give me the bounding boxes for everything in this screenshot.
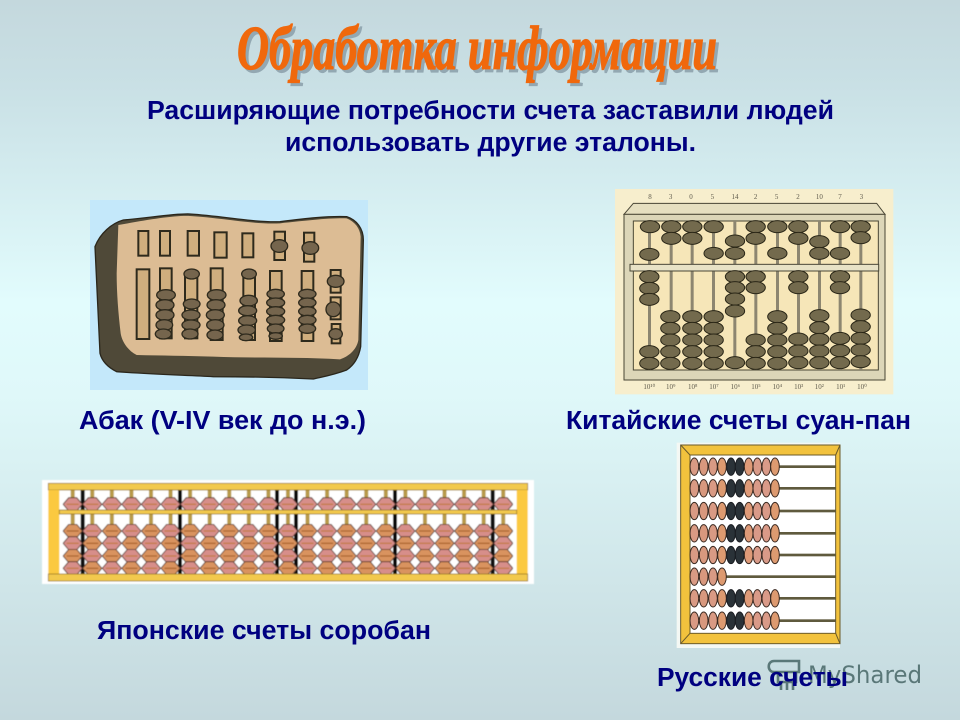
caption: soroban: Японские счеты соробан [97, 617, 431, 645]
illustration: Chinese suan-pan: 10² [815, 383, 824, 391]
intro text: Расширяющие потребности счета заставили людей [147, 97, 834, 125]
illustration: Chinese suan-pan: 10³ [794, 383, 803, 391]
illustration: Chinese suan-pan: 2 [754, 193, 758, 201]
illustration: Chinese suan-pan: 0 [689, 193, 693, 201]
illustration: Chinese suan-pan: 10⁷ [709, 383, 719, 391]
illustration: Chinese suan-pan: 10⁴ [773, 383, 783, 391]
illustration: Chinese suan-pan: 10⁰ [857, 383, 867, 391]
illustration: Chinese suan-pan: 10⁵ [751, 383, 761, 391]
illustration: Chinese suan-pan: 2 [796, 193, 800, 201]
title: Обработка информации [240, 18, 720, 86]
title: Обработка информации [237, 15, 717, 83]
caption: suan-pan: Китайские счеты суан-пан [566, 407, 911, 435]
illustration: Chinese suan-pan: 5 [775, 193, 779, 201]
illustration: Chinese suan-pan: 10⁶ [731, 383, 741, 391]
illustration: Chinese suan-pan: 10⁸ [688, 383, 698, 391]
watermark: MyShared [769, 661, 922, 690]
illustration: Chinese suan-pan: 10¹ [836, 383, 845, 391]
caption: Russian abacus: Русские счеты [657, 664, 848, 692]
illustration: Chinese suan-pan: 3 [860, 193, 864, 201]
illustration: Chinese suan-pan [615, 189, 893, 394]
illustration: Chinese suan-pan: 7 [838, 193, 842, 201]
title [237, 15, 720, 86]
illustration: Japanese soroban [42, 480, 534, 584]
illustration: Chinese suan-pan: 5 [711, 193, 715, 201]
illustration: Chinese suan-pan: 3 [669, 193, 673, 201]
illustration: Chinese suan-pan: 8 [648, 193, 652, 201]
intro text: использовать другие эталоны. [285, 129, 696, 157]
illustration: Chinese suan-pan: 14 [732, 193, 739, 201]
illustration: Chinese suan-pan: 10 [816, 193, 823, 201]
watermark: MyShared: MyShared [808, 661, 922, 689]
illustration: stone abacus [90, 200, 368, 390]
intro text [147, 97, 834, 157]
illustration: Chinese suan-pan: 10¹⁰ [643, 383, 655, 391]
illustration: Russian abacus [677, 443, 840, 648]
illustration: Chinese suan-pan: 10⁹ [666, 383, 676, 391]
caption: abacus: Абак (V-IV век до н.э.) [79, 407, 366, 435]
